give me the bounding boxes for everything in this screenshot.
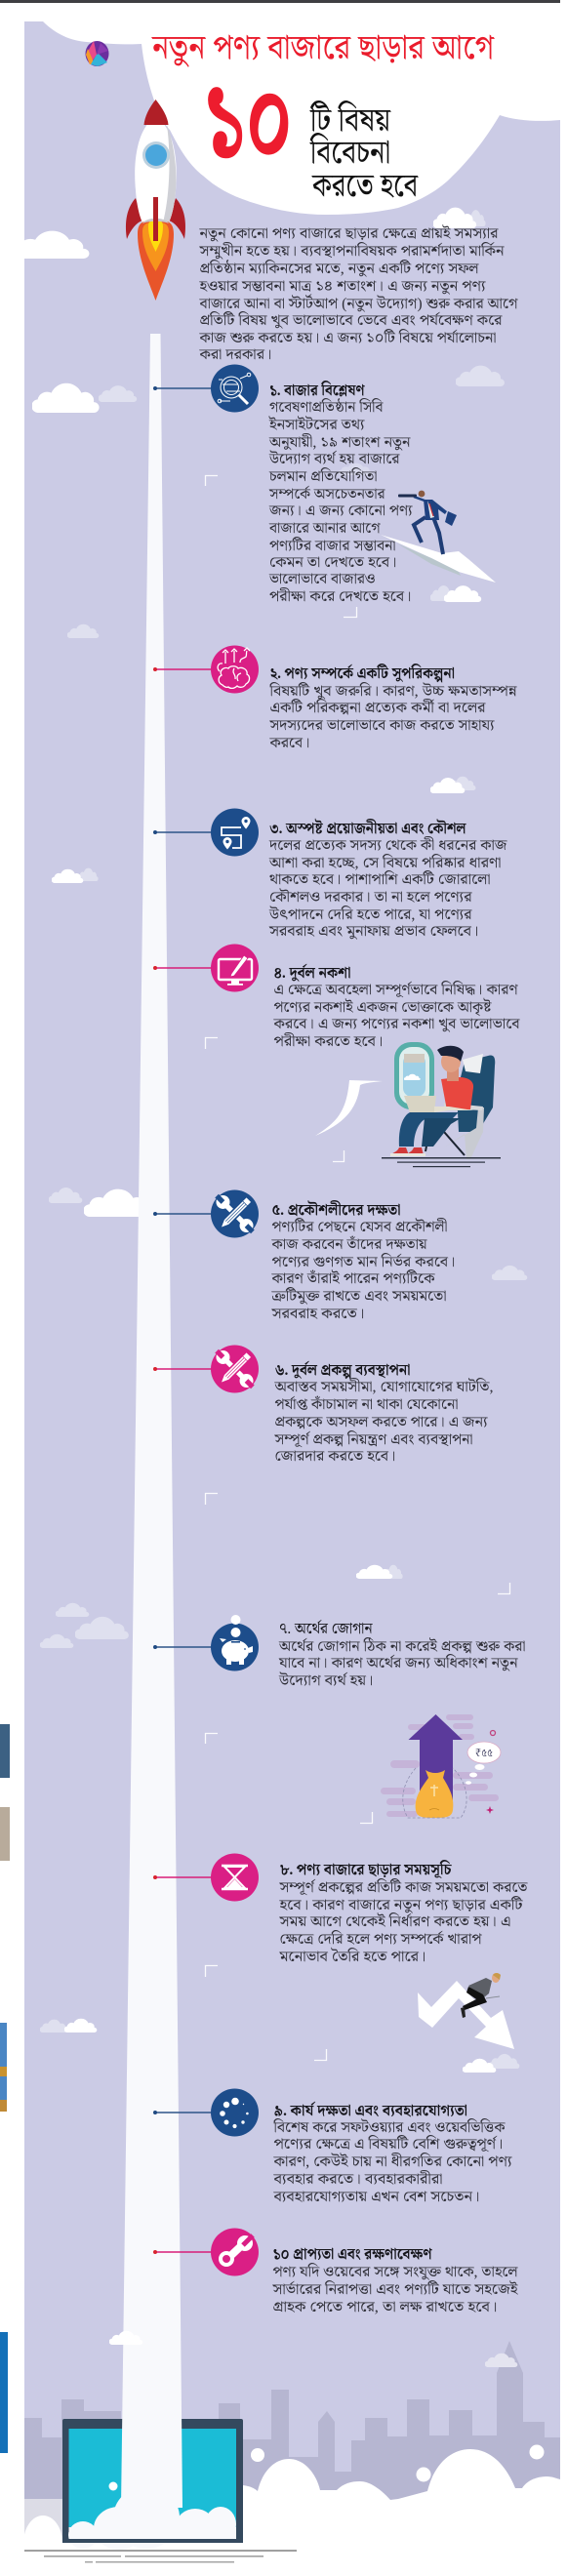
icon: brain with arrows (211, 646, 259, 693)
body text: ইনসাইটসের তথ্য (268, 414, 365, 433)
body text: পণ্যের ক্ষেত্রে এ বিষয়টি বেশি গুরুত্বপূর্ণ। (273, 2134, 504, 2153)
item 6: poor project management (153, 1345, 494, 1465)
connector (153, 386, 224, 390)
intro paragraph: নতুন কোনো পণ্য বাজারে ছাড়ার ক্ষেত্রে প্রায়ই সমস্যার (198, 222, 500, 242)
body text (273, 1377, 494, 1465)
intro paragraph: করা দরকার। (198, 346, 271, 363)
subtitle: বিবেচনা (309, 133, 390, 171)
connector (153, 830, 224, 834)
streaks (381, 1714, 499, 1817)
body text: অবাস্তব সময়সীমা, যোগাযোগের ঘাটতি, (273, 1377, 494, 1395)
item 8: launch schedule (153, 1854, 529, 1965)
icon: wrench (211, 2229, 259, 2275)
clouds at the laptop base (68, 2486, 236, 2550)
body text: পণ্যের গুণগত মান নির্ভর করবে। (271, 1252, 455, 1270)
body text: উৎপাদনে দেরি হতে পারে, যা পণ্যের (268, 905, 473, 923)
body text: পণ্যটির পেছনে যেসব প্রকৌশলী (271, 1217, 447, 1235)
body text: গ্রাহক পেতে পারে, তা লক্ষ রাখতে হবে। (273, 2299, 498, 2315)
illustration: businessman on paper plane (381, 491, 496, 583)
body text: জোরদার করতে হবে। (275, 1448, 396, 1465)
connector (153, 1367, 224, 1371)
illustration: money bag and arrow (381, 1714, 501, 1818)
icon: fins (126, 198, 142, 239)
icon: hourglass (211, 1854, 259, 1901)
ground shadow lines (24, 2550, 297, 2562)
item 7: funding (153, 1615, 525, 1689)
illustration: man on falling arrow (418, 1973, 514, 2049)
connector (153, 966, 224, 970)
icon: route pins (211, 808, 259, 857)
body text: আশা করা হচ্ছে, সে বিষয়ে পরিষ্কার ধারণা (268, 853, 502, 871)
body text: অর্থের জোগান ঠিক না করেই প্রকল্প শুরু করা (278, 1635, 525, 1655)
intro paragraph: সম্মুখীন হতে হয়। ব্যবস্থাপনাবিষয়ক পরামর্শদাতা মার্কিন (198, 241, 505, 261)
heading: ১. বাজার বিশ্লেষণ (269, 381, 365, 399)
body text: ব্যবহারযোগ্যতায় এখন বেশ সচেতন। (272, 2189, 480, 2205)
body text (278, 1635, 525, 1689)
subtitle: টি বিষয় (309, 101, 392, 139)
item 3: vague requirements and strategy (153, 808, 507, 941)
body text: পরীক্ষা করে দেখতে হবে। (269, 586, 412, 605)
laptop screen (62, 2419, 243, 2543)
icon: porthole (142, 141, 170, 169)
body text: ক্ষেত্রে দেরি হলে পণ্য সম্পর্কে খারাপ (279, 1929, 483, 1948)
logo (86, 41, 109, 66)
body text: গবেষণাপ্রতিষ্ঠান সিবি (269, 397, 385, 416)
heading: ৬. দুর্বল প্রকল্প ব্যবস্থাপনা (275, 1360, 410, 1380)
item 9: performance and usability (153, 2088, 512, 2205)
heading: ৫. প্রকৌশলীদের দক্ষতা (271, 1200, 400, 1219)
body text: বিষয়টি খুব জরুরি। কারণ, উচ্চ ক্ষমতাসম্পন্ন (268, 681, 517, 701)
body text (272, 980, 521, 1050)
body text (268, 397, 413, 605)
cloud over beam (109, 2331, 142, 2345)
clouds (13, 208, 527, 2367)
body text: সম্পূর্ণ প্রকল্পের প্রতিটি কাজ সময়মতো করতে (278, 1877, 529, 1897)
connector (153, 1645, 224, 1649)
window (394, 1042, 434, 1109)
body text: পণ্যের নকশাই একজন ভোক্তাকে আকৃষ্ট (273, 996, 492, 1017)
body text: প্রকল্পকে অসফল করতে পারে। এ জন্য (275, 1414, 488, 1430)
connector (153, 1212, 224, 1216)
body text: কারণ, কেউই চায় না ধীরগতির কোনো পণ্য (272, 2151, 512, 2170)
shoes (390, 1147, 409, 1155)
body text: অনুযায়ী, ১৯ শতাংশ নতুন (268, 432, 411, 451)
body text (268, 681, 517, 751)
item 1: market analysis (153, 365, 413, 605)
icon: wrench and pencil (211, 1345, 259, 1393)
body text (270, 1217, 455, 1322)
body text: কারণ তাঁরাই পারেন পণ্যটিকে (270, 1268, 436, 1287)
body text: কৌশলও দরকার। তা না হলে পণ্যের (269, 887, 473, 906)
white swoosh (315, 1080, 383, 1136)
icon: nose (144, 100, 168, 125)
icon: flame (138, 221, 174, 301)
subtitle (309, 101, 419, 204)
heading: ৪. দুর্বল নকশা (273, 963, 351, 983)
rocket (126, 100, 185, 301)
connector (153, 2111, 224, 2114)
body text: করবে। এ জন্য পণ্যের নকশা খুব ভালোভাবে (272, 1016, 521, 1033)
arrow (408, 1714, 463, 1800)
body text: মনোভাব তৈরি হতে পারে। (278, 1946, 425, 1965)
body text: পণ্য যদি ওয়েবের সঙ্গে সংযুক্ত থাকে, তাহলে (273, 2262, 519, 2281)
body text: উদ্যোগ ব্যর্থ হয় বাজারে (268, 449, 401, 467)
item 5: engineers' skills (153, 1190, 455, 1322)
icon: monitor and pencil (211, 945, 259, 991)
connector (153, 667, 224, 671)
intro paragraph: হওয়ার সম্ভাবনা মাত্র ১৪ শতাংশ। এ জন্য নতুন পণ্য (198, 278, 486, 295)
body text: সম্পর্কে অসচেতনতার (268, 485, 386, 503)
body text: সম্পূর্ণ প্রকল্প নিয়ন্ত্রণ এবং ব্যবস্থাপনা (273, 1429, 472, 1449)
body text: সময় আগে থেকেই নির্ধারণ করতে হয়। এ (278, 1911, 511, 1930)
body text: ভালোভাবে বাজারও (268, 571, 375, 587)
corner brackets (205, 476, 509, 2061)
body text: সদস্যদের ভালোভাবে কাজ করতে সাহায্য (268, 717, 495, 734)
icon: wrench and pencil (211, 1190, 259, 1237)
body text (272, 2117, 512, 2205)
icon: piggy bank (211, 1615, 259, 1670)
legs (399, 1112, 459, 1147)
item 10: availability and maintenance (153, 2229, 519, 2315)
body text: সার্ভারের নিরাপত্তা এবং পণ্যটি যাতে সহজেই (271, 2278, 518, 2298)
intro paragraph: প্রতিষ্ঠান ম্যাকিনসের মতে, নতুন একটি পণ্যে সফল (199, 259, 480, 277)
heading: ১০ প্রাপ্যতা এবং রক্ষণাবেক্ষণ (273, 2246, 432, 2263)
heading: ৩. অস্পষ্ট প্রয়োজনীয়তা এবং কৌশল (269, 818, 466, 837)
body text: হবে। কারণ বাজারে নতুন পণ্য ছাড়ার একটি (278, 1895, 523, 1913)
man (441, 1077, 473, 1110)
heading: ৮. পণ্য বাজারে ছাড়ার সময়সূচি (279, 1860, 453, 1879)
left stray panel edges (0, 1724, 10, 2453)
illustration: man with laptop on airplane seat (315, 1042, 501, 1167)
body text: যাবে না। কারণ অর্থের জন্য অধিকাংশ নতুন (278, 1653, 518, 1671)
heading: ৭. অর্থের জোগান (279, 1620, 373, 1637)
rocket exhaust beam (121, 334, 182, 2508)
body text (278, 1877, 529, 1965)
body text: থাকতে হবে। পাশাপাশি একটি জোরালো (269, 869, 490, 888)
body text: পরীক্ষা করতে হবে। (273, 1031, 383, 1050)
subtitle: করতে হবে (311, 168, 419, 204)
body text: উদ্যোগ ব্যর্থ হয়। (278, 1670, 373, 1689)
body text: পর্যাপ্ত কাঁচামাল না থাকা যেকোনো (275, 1394, 459, 1413)
body text (271, 2262, 519, 2315)
body text: ব্যবহার করতে। ব্যবহারকারীরা (272, 2169, 443, 2188)
intro paragraph: কাজ শুরু করতে হয়। এ জন্য ১০টি বিষয়ে পর্যালোচনা (198, 328, 496, 346)
body text: বাজারে আনার আগে (268, 520, 381, 537)
body text: চলমান প্রতিযোগিতা (268, 466, 377, 485)
thought bubble (467, 1742, 501, 1763)
seat (457, 1055, 495, 1132)
body text: কেমন তা দেখতে হবে। (269, 554, 396, 571)
money bag (416, 1770, 453, 1818)
body text: এ ক্ষেত্রে অবহেলা সম্পূর্ণভাবে নিষিদ্ধ। কারণ (273, 980, 519, 999)
body text: দলের প্রত্যেক সদস্য থেকে কী ধরনের কাজ (268, 835, 507, 854)
icon: loading dots (211, 2088, 259, 2137)
body text: বিশেষ করে সফটওয়্যার এবং ওয়েবভিত্তিক (272, 2117, 506, 2136)
illustration: money bag and arrow: ₹৫৫ (475, 1748, 493, 1759)
body text: করবে। (268, 735, 310, 751)
body text: সরবরাহ করতে। (270, 1306, 365, 1322)
item 2: product plan (153, 646, 517, 751)
heading: ২. পণ্য সম্পর্কে একটি সুপরিকল্পনা (269, 664, 455, 683)
big number: ১০ (203, 60, 293, 181)
item 4: poor design (153, 945, 521, 1050)
ground clouds (0, 2439, 567, 2576)
intro paragraph: প্রতিটি বিষয় খুব ভালোভাবে ভেবে এবং পর্যবেক্ষণ করে (199, 310, 504, 330)
body text: পণ্যটির বাজার সম্ভাবনা (269, 536, 396, 554)
body text: জন্য। এ জন্য কোনো পণ্য (268, 503, 413, 519)
title: নতুন পণ্য বাজারে ছাড়ার আগে (150, 28, 495, 68)
connector (153, 2250, 224, 2254)
icon: magnifier (211, 365, 259, 412)
dashed ring (403, 1768, 466, 1818)
skyline (24, 2341, 560, 2508)
body text: কাজ করবেন তাঁদের দক্ষতায় (270, 1234, 427, 1253)
body text (268, 835, 507, 941)
ground lines (382, 1157, 501, 1159)
intro paragraph: বাজারে আনা বা স্টার্টআপ (নতুন উদ্যোগ) শুরু করার আগে (198, 294, 518, 312)
body text: একটি পরিকল্পনা প্রত্যেক কর্মী বা দলের (269, 698, 487, 716)
connector (153, 1875, 224, 1879)
body text: সরবরাহ এবং মুনাফায় প্রভাব ফেলবে। (268, 923, 478, 941)
intro paragraph (198, 222, 518, 363)
heading: ৯. কার্য দক্ষতা এবং ব্যবহারযোগ্যতা (273, 2101, 467, 2119)
body text: ত্রুটিমুক্ত রাখতে এবং সময়মতো (270, 1286, 447, 1306)
